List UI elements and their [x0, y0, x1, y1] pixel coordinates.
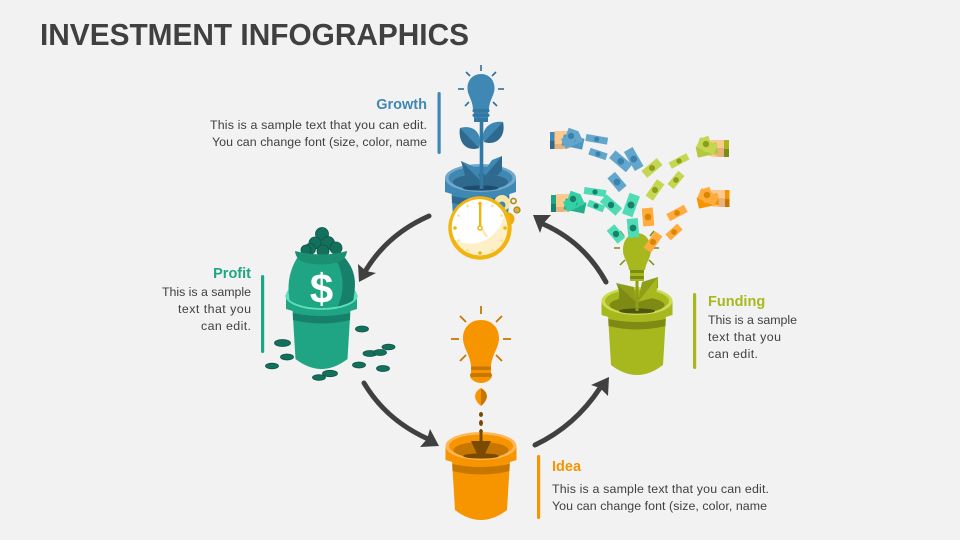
panel: funding [550, 128, 797, 375]
text block: idea: This is a sample text that you can edit. [552, 482, 769, 496]
icon: teal money stream [584, 187, 640, 217]
title: INVESTMENT INFOGRAPHICS [40, 17, 469, 52]
icon: green pot with sprout bulb [602, 231, 672, 375]
arrow: profit to idea [364, 383, 439, 447]
icon: orange money stream [642, 205, 688, 240]
text block: growth: This is a sample text that you can edit. [210, 118, 427, 132]
arrow: funding to growth [533, 215, 606, 282]
icon: seed and falling dots [475, 388, 487, 436]
icon: orange bulb [451, 306, 511, 383]
icon: hand with green money [696, 136, 729, 158]
text block: growth: You can change font (size, color, name [212, 135, 427, 149]
accent bar: idea [537, 455, 540, 519]
text block: profit: can edit. [201, 319, 251, 333]
heading: growth: Growth [376, 97, 427, 113]
icon: gears [494, 195, 520, 226]
icon: dollar sign: $ [310, 265, 333, 312]
heading: idea: Idea [552, 459, 582, 475]
icon: blue plant with bulb in pot [445, 65, 520, 260]
text block: idea: You can change font (size, color, name [552, 499, 767, 513]
heading: profit: Profit [213, 266, 251, 282]
text block: funding: This is a sample [708, 313, 797, 327]
panel: idea [446, 306, 769, 520]
icon: orange pot [446, 432, 516, 520]
text block: funding: can edit. [708, 347, 758, 361]
icon: hand with orange money [697, 187, 730, 209]
heading: funding: Funding [708, 294, 765, 310]
icon: scattered coins [266, 326, 395, 380]
panel: profit [162, 228, 395, 380]
icon: clock [448, 196, 512, 260]
icon: bills on bulb [607, 218, 662, 253]
accent bar: growth [438, 92, 441, 154]
panel: growth [210, 65, 520, 260]
icon: teal pot with money bag [286, 228, 357, 369]
icon: money bag [289, 228, 355, 312]
text block: funding: text that you [708, 330, 781, 344]
icon: green money stream [641, 153, 689, 201]
arrow: idea to funding [535, 377, 609, 445]
accent bar: funding [693, 293, 696, 369]
icon: hand with blue money [550, 128, 584, 150]
text block: profit: text that you [178, 302, 251, 316]
accent bar: profit [261, 275, 264, 353]
text block: profit: This is a sample [162, 285, 251, 299]
icon: blue money stream [585, 134, 644, 192]
icon: hand with teal money [551, 191, 586, 214]
arrow: growth to profit [358, 216, 429, 282]
